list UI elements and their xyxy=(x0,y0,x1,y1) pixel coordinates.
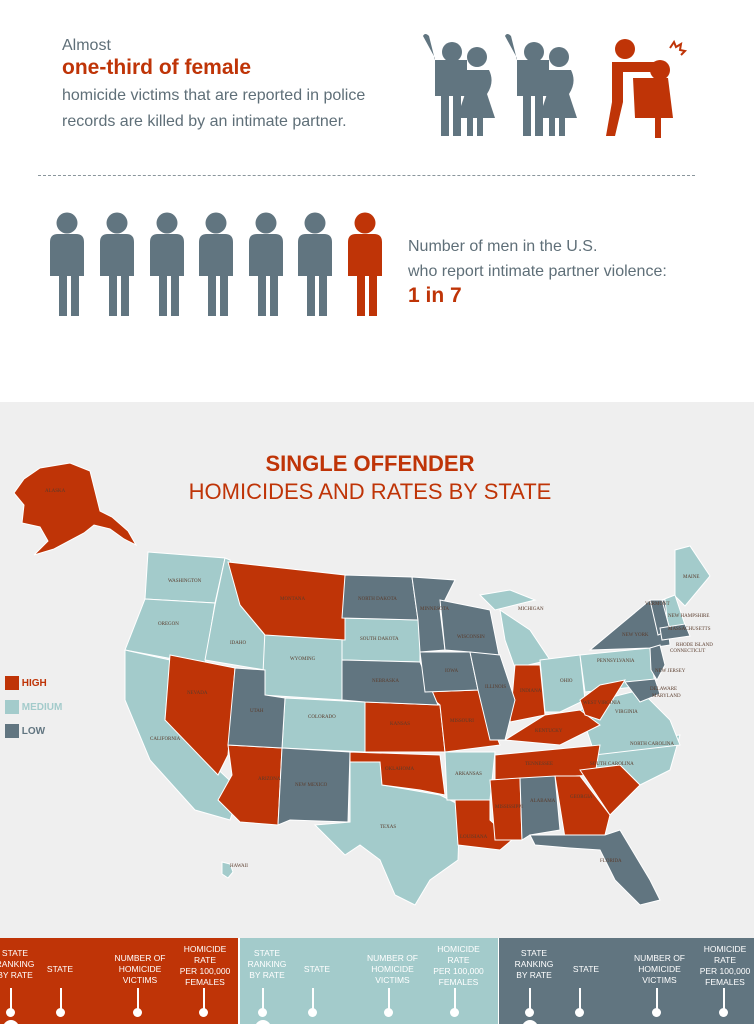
panel: medium table header: STATE xyxy=(254,948,280,958)
map: NORTH CAROLINA xyxy=(630,742,674,747)
map: NEW JERSEY xyxy=(655,669,686,674)
map: NEW MEXICO xyxy=(295,783,328,788)
panel: high table header: STATE xyxy=(2,948,28,958)
legend: MEDIUM xyxy=(22,702,62,713)
text block: 1 in 7: 1 in 7 xyxy=(408,284,462,307)
panel: high table header: STATE xyxy=(47,964,73,974)
panel: high table header xyxy=(0,938,238,1024)
icons: seven men xyxy=(50,212,382,316)
panel: medium table header: NUMBER OF xyxy=(367,953,418,963)
panel: medium table header: RATE xyxy=(447,955,470,965)
panel: high table header: HOMICIDE xyxy=(119,964,161,974)
text block: 1 in 7: who report intimate partner violence: xyxy=(408,263,667,280)
panel: low table header: BY RATE xyxy=(516,970,552,980)
map: ALABAMA xyxy=(530,799,556,804)
map: MICHIGAN xyxy=(518,607,544,612)
panel: medium table header: PER 100,000 xyxy=(433,966,484,976)
map: MARYLAND xyxy=(652,694,681,699)
map: IDAHO xyxy=(230,641,246,646)
map: INDIANA xyxy=(520,689,542,694)
panel: low table header: PER 100,000 xyxy=(700,966,750,976)
map: WYOMING xyxy=(290,657,316,662)
panel: high table header: PER 100,000 xyxy=(180,966,230,976)
map: PENNSYLVANIA xyxy=(597,659,635,664)
panel: medium table header: FEMALES xyxy=(439,977,478,987)
legend xyxy=(5,676,62,738)
map: IOWA xyxy=(445,669,458,674)
map: MINNESOTA xyxy=(420,607,449,612)
map: FLORIDA xyxy=(600,859,622,864)
map: GEORGIA xyxy=(570,795,593,800)
text block: one-third of female: one-third of female xyxy=(62,56,251,79)
divider xyxy=(38,175,695,176)
title: SINGLE OFFENDER xyxy=(265,451,474,476)
map: NEW HAMPSHIRE xyxy=(668,614,709,619)
legend: LOW xyxy=(22,726,45,737)
map: WASHINGTON xyxy=(168,579,202,584)
map: TEXAS xyxy=(380,825,396,830)
map: CALIFORNIA xyxy=(150,737,181,742)
text block: one-third of female: homicide victims that are reported in police records are killed by an intimate partner. xyxy=(62,87,365,130)
map: MISSOURI xyxy=(450,719,474,724)
map: KANSAS xyxy=(390,722,410,727)
map: VIRGINIA xyxy=(615,710,638,715)
panel: low table header: STATE xyxy=(521,948,547,958)
map: ARIZONA xyxy=(258,777,281,782)
map: KENTUCKY xyxy=(535,729,563,734)
map: ALASKA xyxy=(45,489,66,494)
map: NEBRASKA xyxy=(372,679,399,684)
map: OREGON xyxy=(158,622,179,627)
panel: low table header: FEMALES xyxy=(705,977,745,987)
panel: high table header: VICTIMS xyxy=(123,975,157,985)
panel: high table header: FEMALES xyxy=(185,977,225,987)
map: LOUISIANA xyxy=(460,835,488,840)
panel: high table header: RATE xyxy=(194,955,216,965)
icons: couples and violence xyxy=(423,34,687,138)
map: OHIO xyxy=(560,679,573,684)
map: SOUTH CAROLINA xyxy=(590,762,634,767)
panel: medium table header: BY RATE xyxy=(249,970,285,980)
panel: low table header: STATE xyxy=(573,964,599,974)
text block: 1 in 7: Number of men in the U.S. xyxy=(408,238,597,255)
panel: medium table header: STATE xyxy=(304,964,330,974)
Alaska xyxy=(14,463,136,555)
panel: low table header: NUMBER OF xyxy=(634,953,685,963)
map xyxy=(14,462,713,906)
map: RHODE ISLAND xyxy=(676,643,713,648)
panel: medium table header: HOMICIDE xyxy=(371,964,414,974)
panel: high table header: HOMICIDE xyxy=(184,944,226,954)
panel: medium table header: VICTIMS xyxy=(375,975,410,985)
map: ARKANSAS xyxy=(455,772,482,777)
panel: low table header: HOMICIDE xyxy=(704,944,746,954)
map: SOUTH DAKOTA xyxy=(360,637,399,642)
panel: high table header: NUMBER OF xyxy=(114,953,166,963)
panel: low table header: HOMICIDE xyxy=(638,964,681,974)
map: CONNECTICUT xyxy=(670,649,705,654)
map: MONTANA xyxy=(280,597,306,602)
panel: medium table header: RANKING xyxy=(248,959,286,969)
map: WEST VIRGINIA xyxy=(583,701,621,706)
map: TENNESSEE xyxy=(525,762,553,767)
map: HAWAII xyxy=(230,864,248,869)
panel: low table header: VICTIMS xyxy=(642,975,677,985)
map: DELAWARE xyxy=(650,687,677,692)
text block: one-third of female xyxy=(62,37,365,130)
map: VERMONT xyxy=(645,602,670,607)
map: NEVADA xyxy=(187,691,208,696)
panel: low table header xyxy=(499,938,754,1024)
title: HOMICIDES AND RATES BY STATE xyxy=(189,479,551,504)
title xyxy=(189,451,551,504)
map: MISSISSIPPI xyxy=(495,805,523,810)
map: MAINE xyxy=(683,575,699,580)
text block: 1 in 7 xyxy=(408,238,667,307)
panel: map section xyxy=(0,402,754,938)
map: UTAH xyxy=(250,709,264,714)
map: NORTH DAKOTA xyxy=(358,597,397,602)
panel: medium table header: HOMICIDE xyxy=(437,944,480,954)
panel: medium table header xyxy=(240,938,498,1024)
map: COLORADO xyxy=(308,715,336,720)
panel: low table header: RATE xyxy=(714,955,736,965)
panel: low table header: RANKING xyxy=(515,959,553,969)
map: OKLAHOMA xyxy=(385,767,415,772)
legend: HIGH xyxy=(22,678,47,689)
text block: one-third of female: Almost xyxy=(62,37,111,54)
map: WISCONSIN xyxy=(457,635,485,640)
map: MASSACHUSETTS xyxy=(668,627,711,632)
map: NEW YORK xyxy=(622,633,649,638)
map: ILLINOIS xyxy=(485,685,506,690)
